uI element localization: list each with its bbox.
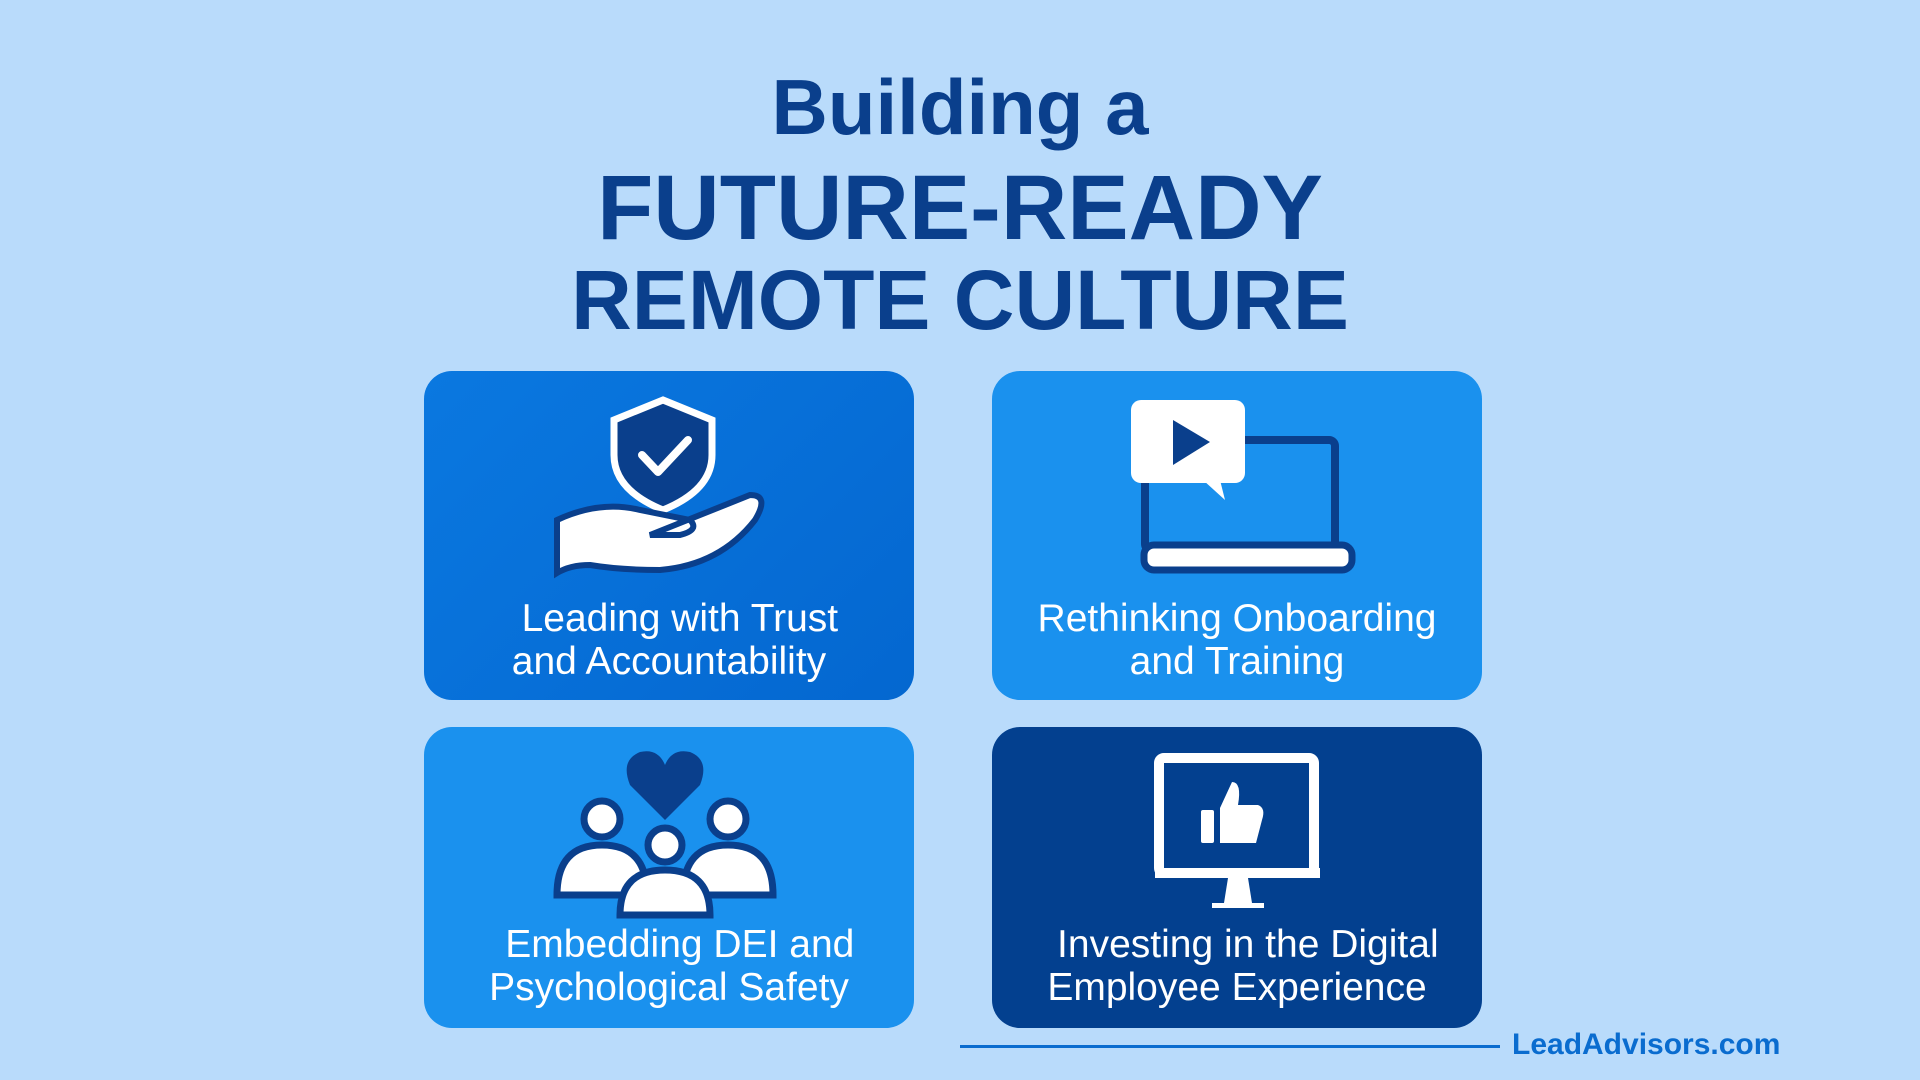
title line 1: Building a — [772, 63, 1148, 151]
panel: onboarding — [992, 371, 1482, 700]
label — [1038, 597, 1436, 683]
title line 3: REMOTE CULTURE — [571, 253, 1349, 347]
label: Rethinking Onboarding — [1038, 597, 1436, 640]
label — [1047, 923, 1439, 1009]
icon: people with heart — [554, 751, 776, 918]
panel: digital experience — [992, 727, 1482, 1028]
icon: shield in hand — [554, 396, 764, 578]
label: Employee Experience — [1047, 966, 1427, 1009]
panel: trust — [424, 371, 914, 700]
label — [489, 923, 854, 1009]
icon: laptop with video — [1131, 400, 1356, 574]
label: Psychological Safety — [489, 966, 849, 1009]
label: Investing in the Digital — [1057, 923, 1439, 966]
brand: LeadAdvisors.com — [1512, 1028, 1780, 1061]
footer line — [960, 1045, 1500, 1048]
title line 2: FUTURE-READY — [597, 157, 1323, 259]
icon: monitor thumbs up — [1154, 753, 1320, 908]
panel: DEI — [424, 727, 914, 1028]
label: Embedding DEI and — [505, 923, 854, 966]
label: and Training — [1130, 640, 1344, 683]
label: and Accountability — [512, 640, 826, 683]
label — [512, 597, 838, 683]
label: Leading with Trust — [522, 597, 838, 640]
